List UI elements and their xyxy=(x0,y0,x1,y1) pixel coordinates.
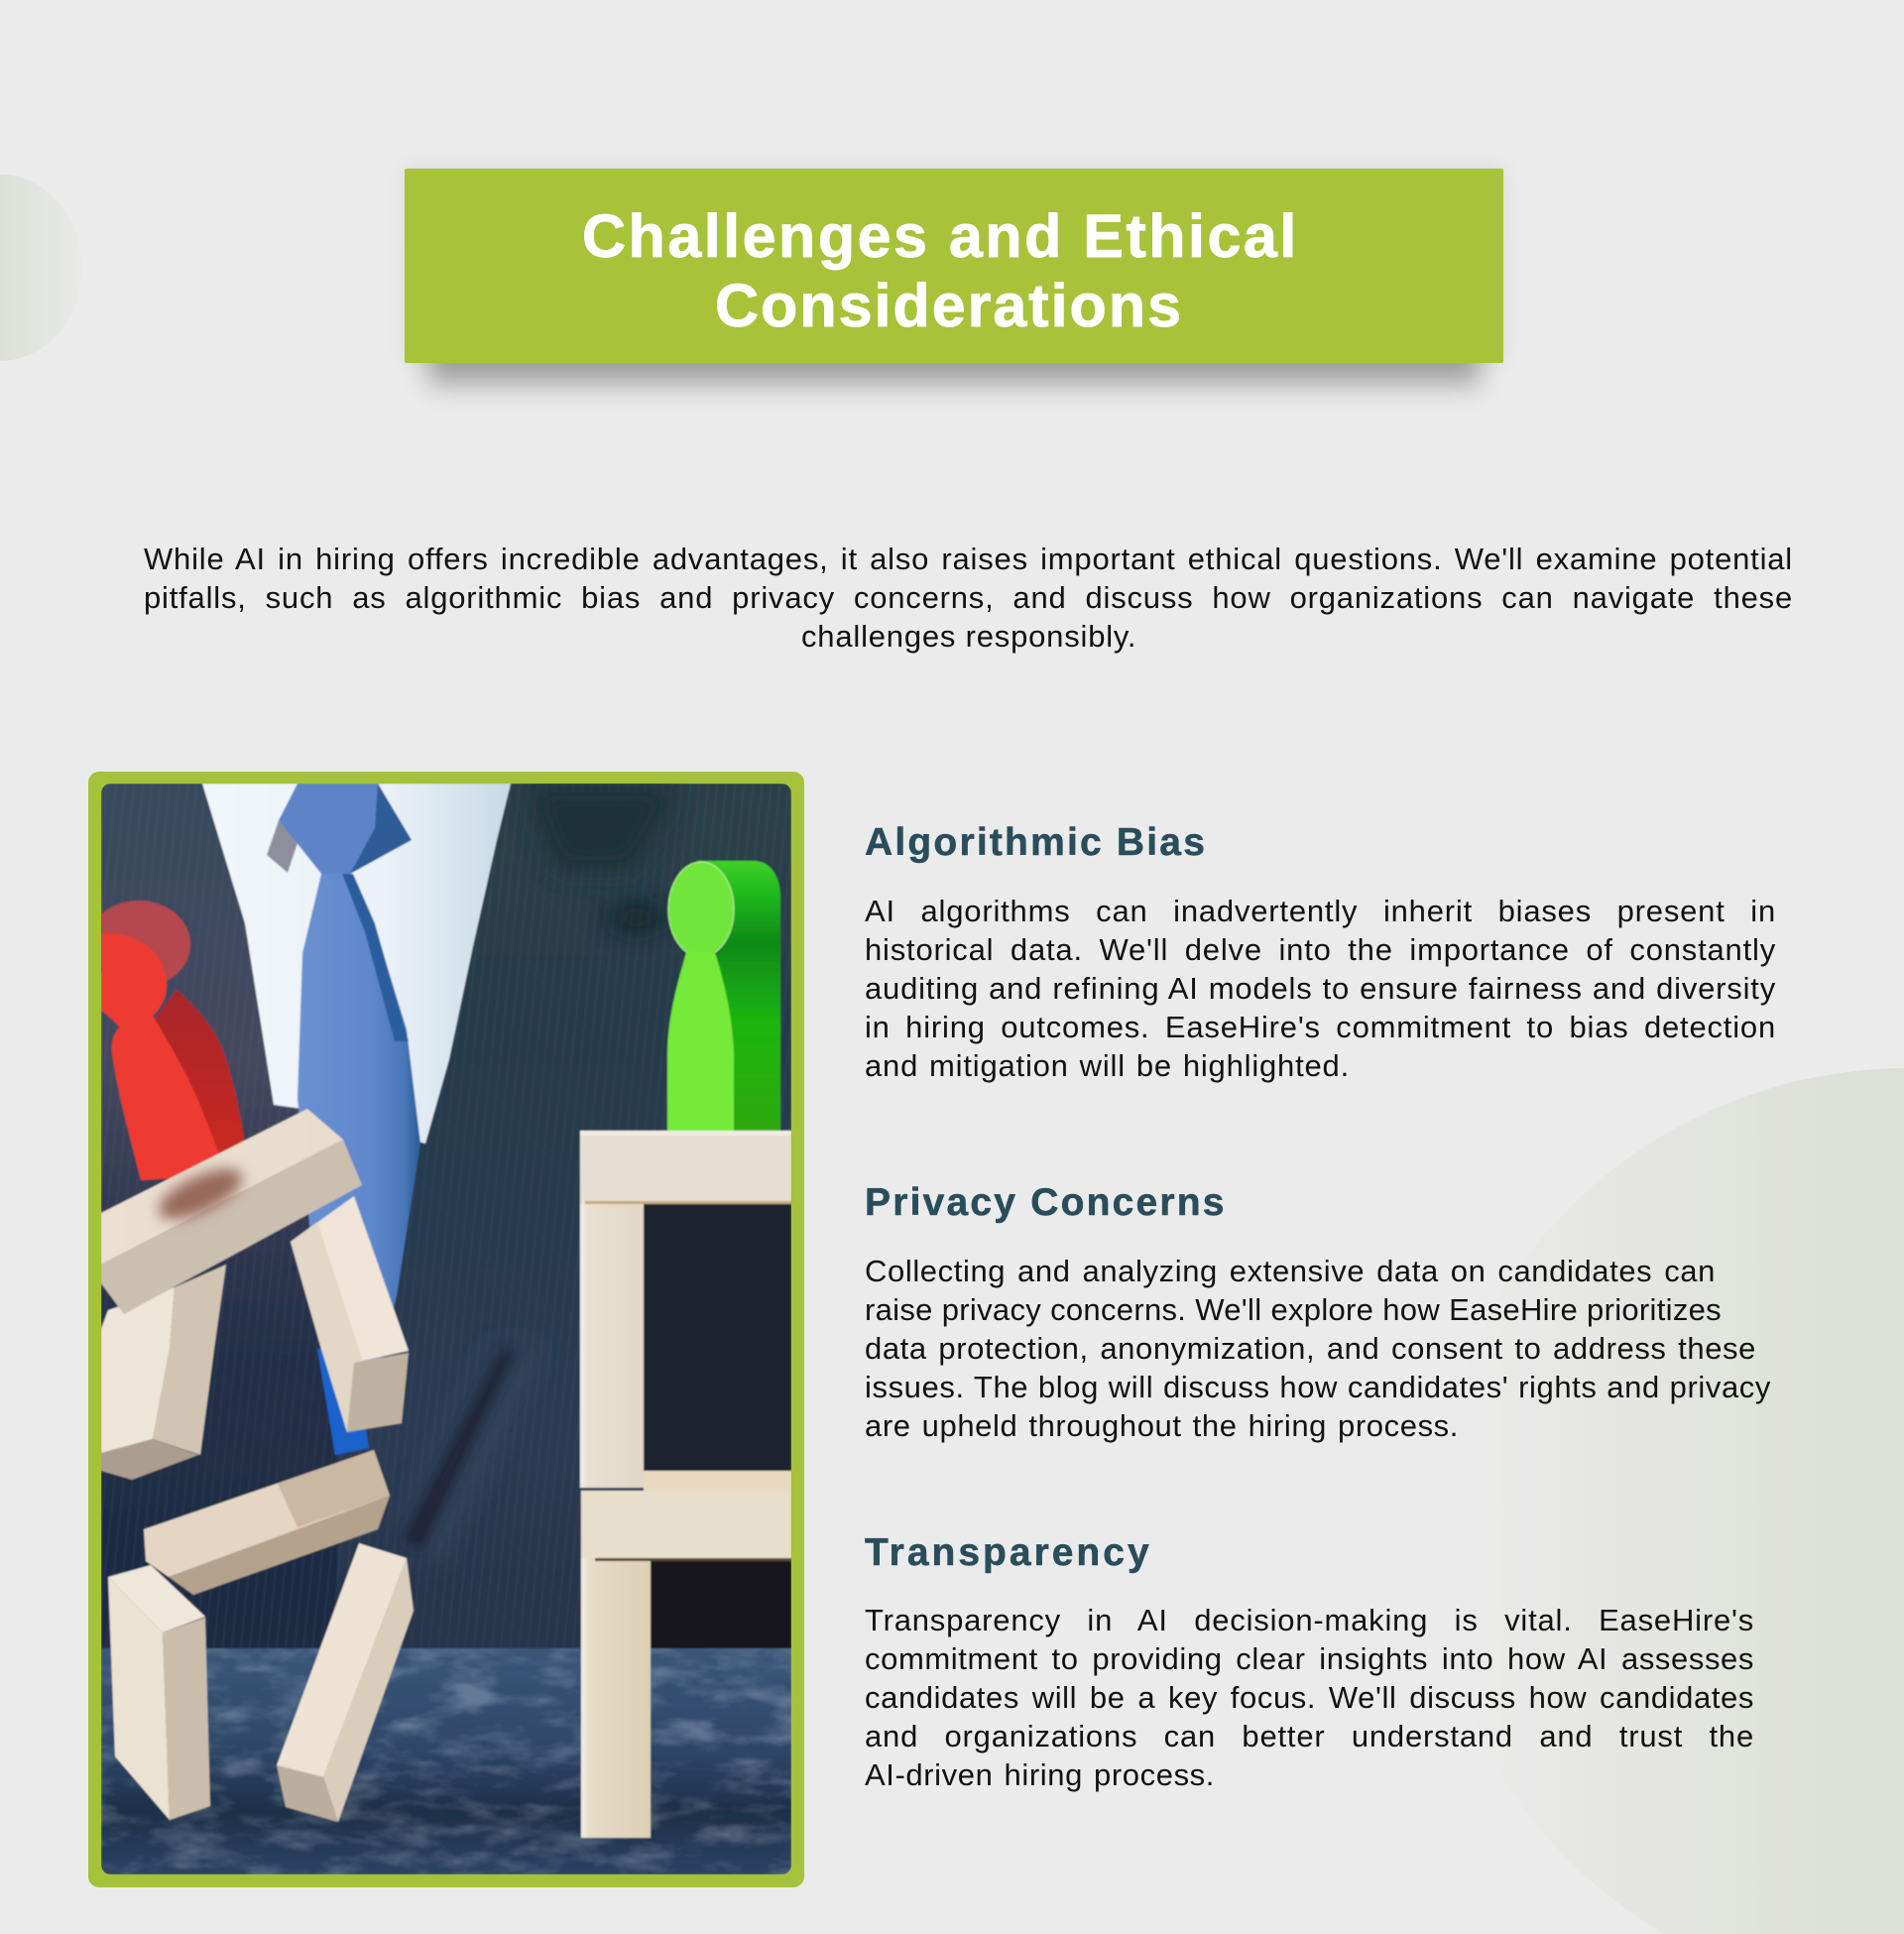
text: Privacy Concerns body: Collecting and analyzing extensive data on candidates can xyxy=(865,1254,1716,1288)
block: right lower plank xyxy=(581,1471,791,1561)
suit pinstripes xyxy=(102,954,718,1647)
figure: red pawn xyxy=(87,901,245,1180)
block: middle falling piece xyxy=(277,1543,414,1822)
text: Privacy Concerns body: data protection, anonymization, and consent to address these xyxy=(865,1331,1756,1366)
heading: Transparency: Transparency xyxy=(865,1531,1152,1574)
block: lower left vertical upper piece xyxy=(101,1265,226,1480)
text: Transparency body xyxy=(865,1603,1754,1792)
block: right column lower xyxy=(581,1547,651,1838)
text: Transparency body: candidates will be a key focus. We'll discuss how candidates xyxy=(865,1680,1754,1715)
block: left falling piece xyxy=(108,1565,210,1820)
text: Algorithmic Bias body: AI algorithms can inadvertently inherit biases present in xyxy=(865,894,1776,928)
intro paragraph: pitfalls, such as algorithmic bias and privacy concerns, and discuss how organizations can navigate these xyxy=(144,580,1793,615)
figure: green pawn xyxy=(667,861,780,1132)
text: Algorithmic Bias body: in hiring outcomes. EaseHire's commitment to bias detection xyxy=(865,1010,1776,1044)
decorative large circle: bottom right xyxy=(1433,1068,1904,1934)
intro paragraph xyxy=(144,542,1793,654)
text: Algorithmic Bias body: and mitigation will be highlighted. xyxy=(865,1048,1350,1083)
block: right column upper xyxy=(580,1204,644,1488)
text: Algorithmic Bias body: historical data. We'll delve into the importance of constantly xyxy=(865,932,1776,967)
block: horizontal lower plank xyxy=(144,1450,390,1595)
intro paragraph: While AI in hiring offers incredible advantages, it also raises important ethical questions. We'll examine potential xyxy=(144,542,1793,576)
shirt xyxy=(202,784,511,1144)
intro paragraph: challenges responsibly. xyxy=(801,619,1136,654)
text: Transparency body: commitment to providing clear insights into how AI assesses xyxy=(865,1641,1754,1676)
suit right xyxy=(337,784,791,1649)
text: Transparency body: AI-driven hiring process. xyxy=(865,1757,1215,1792)
text: Algorithmic Bias body xyxy=(865,894,1776,1083)
text: Privacy Concerns body: are upheld throughout the hiring process. xyxy=(865,1408,1459,1443)
suit left xyxy=(101,784,339,1649)
title line 1: Challenges and Ethical xyxy=(582,202,1299,270)
suit shading xyxy=(397,784,684,1562)
text: Transparency body: Transparency in AI decision-making is vital. EaseHire's xyxy=(865,1603,1754,1637)
heading: Algorithmic Bias: Algorithmic Bias xyxy=(865,821,1207,864)
text: Privacy Concerns body: raise privacy concerns. We'll explore how EaseHire prioritizes xyxy=(865,1292,1722,1327)
block: right top plank xyxy=(580,1131,791,1204)
green frame xyxy=(88,772,804,1887)
dark background between right blocks xyxy=(644,1204,791,1492)
text: Transparency body: and organizations can better understand and trust the xyxy=(865,1719,1754,1753)
heading: Privacy Concerns: Privacy Concerns xyxy=(865,1181,1227,1224)
block: right leaning vertical xyxy=(291,1196,409,1432)
title banner xyxy=(405,169,1503,363)
text: Privacy Concerns body xyxy=(865,1254,1771,1443)
title line 2: Considerations xyxy=(715,272,1183,339)
text: Algorithmic Bias body: auditing and refining AI models to ensure fairness and diversity xyxy=(865,971,1776,1006)
panel: photo with green frame xyxy=(88,772,804,1887)
text: Privacy Concerns body: issues. The blog will discuss how candidates' rights and privacy xyxy=(865,1370,1771,1404)
tie xyxy=(267,784,420,1455)
photo scene xyxy=(87,784,791,1874)
block: top plank under red pawn xyxy=(101,1109,362,1314)
floor xyxy=(101,1648,791,1874)
dark lower panel xyxy=(651,1561,791,1648)
decorative half circle: left edge xyxy=(0,175,82,361)
suit seam xyxy=(402,1349,518,1552)
